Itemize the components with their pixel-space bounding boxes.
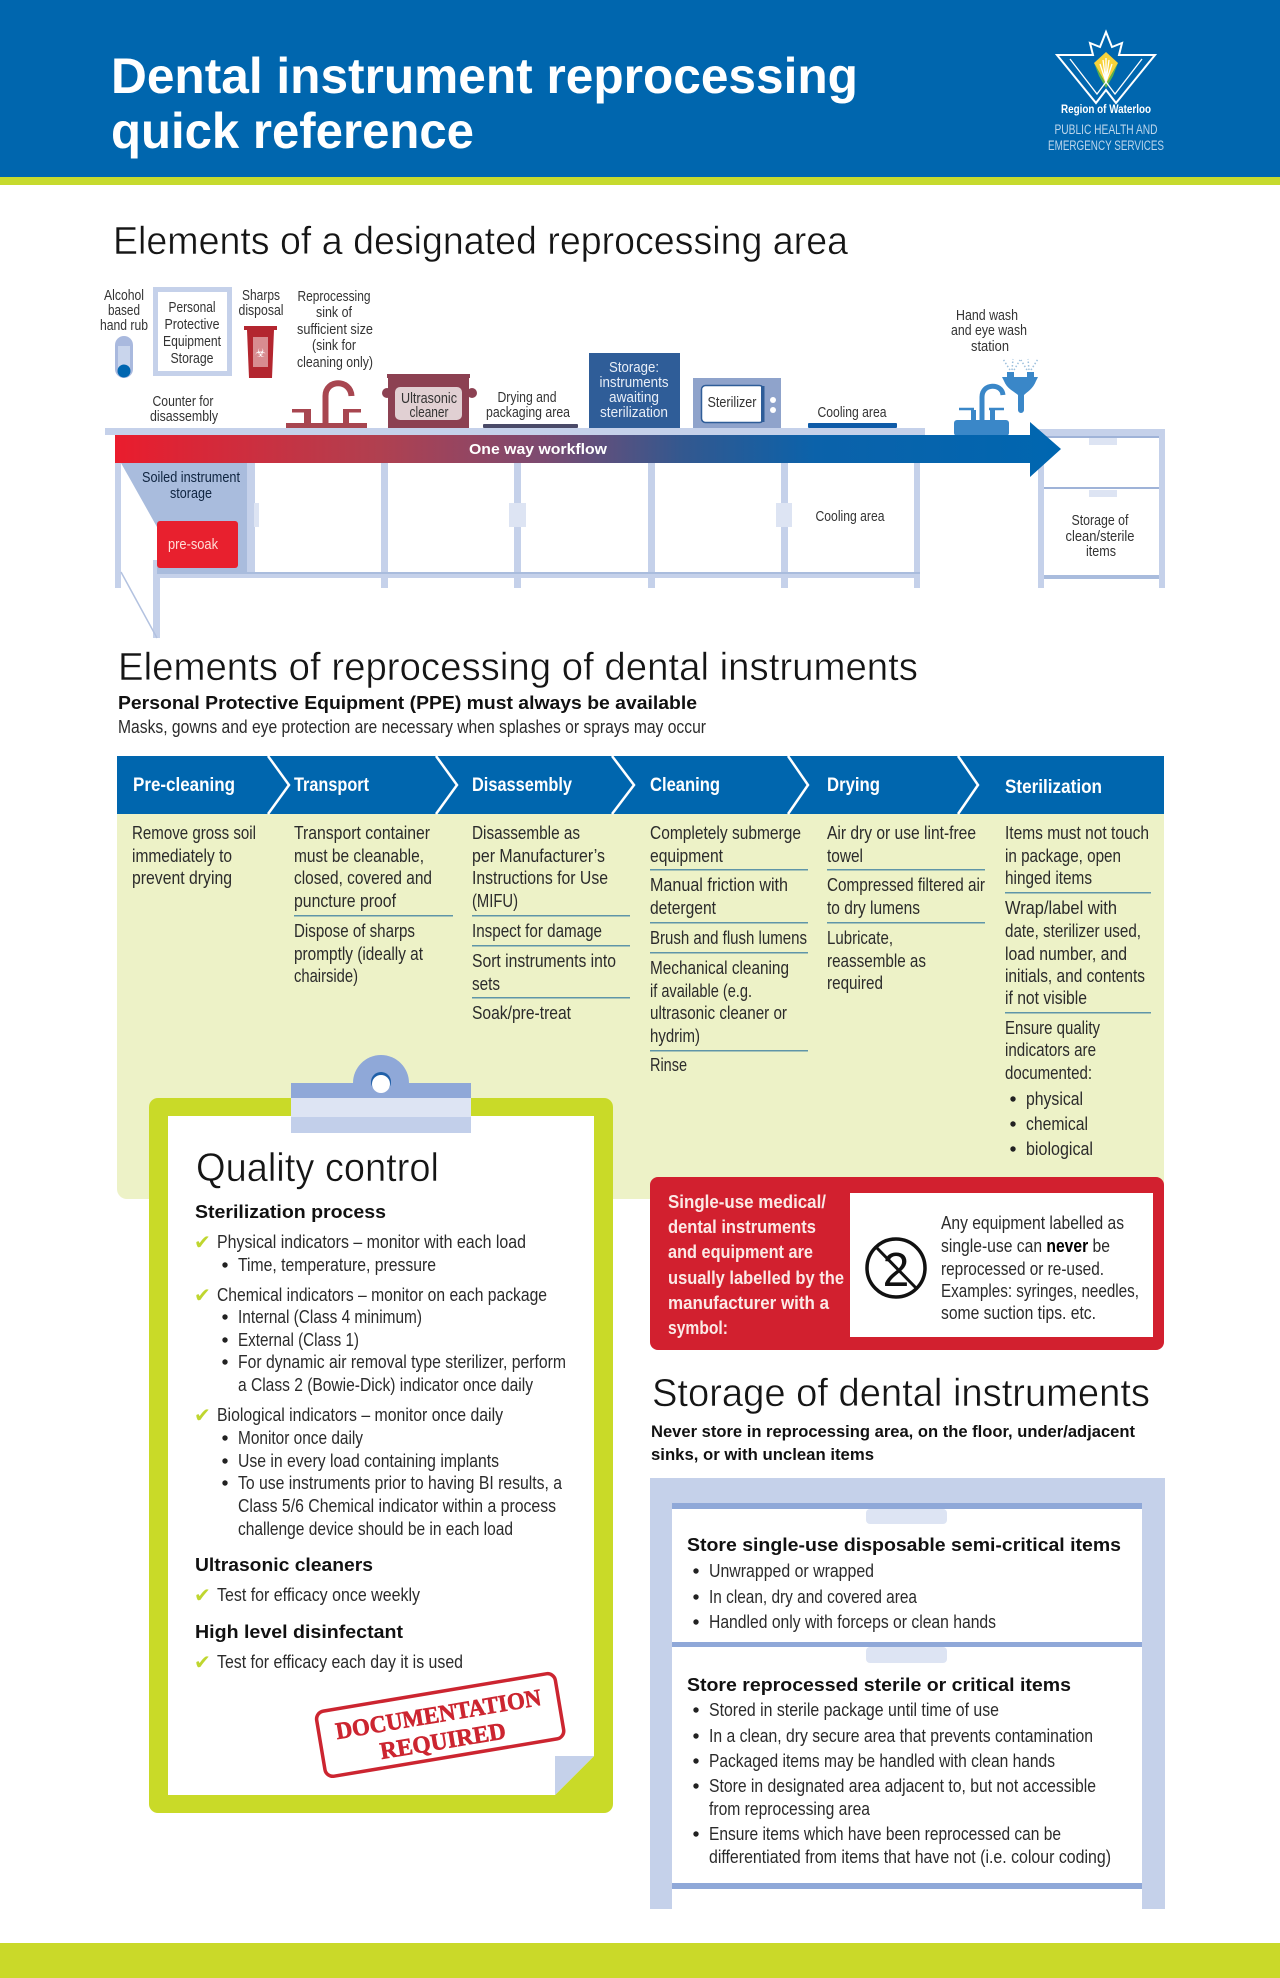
heading: elements of reprocessing: Elements of reprocessing of dental instruments [118,646,918,689]
icon: reprocessing sink faucet [286,383,367,428]
heading: designated reprocessing area: Elements of a designated reprocessing area [113,220,848,263]
cooling area on counter: Cooling area [818,405,887,421]
panel: quality control clipboard [149,1055,613,1813]
icon: do not reuse symbol: 2 [883,1244,909,1297]
column: transport: must be cleanable, [294,845,424,866]
heading: quality control: Quality control [196,1146,439,1190]
storage awaiting sterilization: Storage: [609,360,659,376]
title [111,48,858,159]
soiled instrument storage: Soiled instrument [142,470,240,486]
label: reprocessing sink [297,289,373,371]
PPE storage box: Storage [170,351,214,367]
soiled instrument storage: pre-soak [168,537,219,553]
label: reprocessing sink: sufficient size [297,322,373,338]
callout text: usually labelled by the [668,1267,844,1288]
panel: storage cabinet [650,1478,1165,1909]
label: alcohol based hand rub: hand rub [100,318,148,334]
PPE storage box: Protective [164,317,220,333]
chevron header band: Disassembly [472,775,572,796]
column: cleaning: if available (e.g. [650,980,752,1001]
icon: hand rub bottle [115,336,133,378]
label: reprocessing sink: cleaning only) [297,355,373,371]
label: alcohol based hand rub [100,288,148,334]
sterilizer [693,378,781,428]
column: cleaning: hydrim) [650,1025,700,1046]
section: sterilization process: External (Class 1) [238,1329,359,1350]
column: transport: puncture proof [294,890,397,911]
column: sterilization: if not visible [1005,987,1087,1008]
storage awaiting sterilization [589,353,680,428]
storage awaiting sterilization: sterilization [600,405,668,421]
column: disassembly: per Manufacturer’s [472,845,605,866]
shelf: sterile or critical items: Ensure items which have been reprocessed can be [709,1823,1061,1844]
column: cleaning [650,822,808,1075]
column: disassembly: Sort instruments into [472,950,616,971]
section: sterilization process: a Class 2 (Bowie-Dick) indicator once daily [238,1374,534,1395]
column: transport: chairside) [294,965,358,986]
column: drying [827,822,985,993]
section: sterilization process: Class 5/6 Chemical indicator within a process [238,1495,556,1516]
callout explanation: Examples: syringes, needles, [941,1280,1139,1301]
section: sterilization process: Chemical indicators – monitor on each package [217,1284,547,1305]
counter and cabinets [105,428,925,638]
column: sterilization: indicators are [1005,1039,1096,1060]
section: sterilization process: For dynamic air removal type sterilizer, perform [238,1351,566,1372]
shelf: sterile or critical items: Store in designated area adjacent to, but not accessible [709,1775,1096,1796]
column: sterilization: physical [1026,1088,1083,1109]
section: sterilization process: Physical indicators – monitor with each load [217,1231,526,1252]
callout explanation: single-use can never be [941,1235,1110,1256]
section: high level disinfectant: Test for efficacy each day it is used [217,1651,463,1672]
section: sterilization process: Time, temperature, pressure [238,1254,436,1275]
title: quick reference [111,103,474,159]
chevron header band: Pre-cleaning [133,775,235,796]
shelf: single-use items: Unwrapped or wrapped [709,1560,874,1581]
column: cleaning: Manual friction with [650,874,788,895]
column: sterilization: in package, open [1005,845,1121,866]
PPE note [118,692,706,737]
soiled instrument storage [121,463,247,574]
label: alcohol based hand rub: based [108,303,140,319]
section: ultrasonic cleaners: Test for efficacy once weekly [217,1584,421,1605]
column: cleaning: ultrasonic cleaner or [650,1002,787,1023]
column: sterilization: Ensure quality [1005,1017,1101,1038]
column: drying: to dry lumens [827,897,920,918]
title: Dental instrument reprocessing [111,48,858,104]
label: sharps disposal: Sharps [242,288,280,304]
logo: Region of Waterloo: Region of Waterloo [1061,104,1151,116]
cooling area under counter: Cooling area [816,509,885,525]
column: cleaning: Completely submerge [650,822,801,843]
section: high level disinfectant [194,1622,463,1674]
column: transport: Dispose of sharps [294,920,415,941]
section: sterilization process: ✔ [194,1403,211,1427]
shelf: single-use items: Handled only with forceps or clean hands [709,1611,996,1632]
column: sterilization: Wrap/label with [1005,897,1117,918]
icon: ultrasonic cleaner: Ultrasonic [401,391,457,407]
column: pre-cleaning [132,822,256,888]
callout text: dental instruments [668,1216,816,1237]
column: sterilization: hinged items [1005,867,1092,888]
column: sterilization: load number, and [1005,943,1127,964]
section: sterilization process: To use instruments prior to having BI results, a [238,1472,563,1493]
column: sterilization: date, sterilizer used, [1005,920,1141,941]
arrow: one way workflow [115,422,1061,477]
storage warning: sinks, or with unclean items [651,1445,874,1464]
section: sterilization process: ✔ [194,1230,211,1254]
labels: storage of clean/sterile items [1066,513,1134,560]
sterilizer: Sterilizer [708,395,757,411]
callout text: Single-use medical/ [668,1191,826,1212]
labels: storage of clean/sterile items: Storage of [1072,513,1129,529]
column: cleaning: Mechanical cleaning [650,957,789,978]
label: sharps disposal [238,288,284,319]
column: pre-cleaning: prevent drying [132,867,232,888]
header banner [0,0,1280,185]
column: disassembly: Instructions for Use [472,867,608,888]
callout text: symbol: [668,1317,728,1338]
footer band [0,1943,1280,1978]
section: sterilization process: challenge device should be in each load [238,1518,513,1539]
icon: sharps container: ☣ [255,346,266,360]
section: sterilization process: Sterilization process [195,1202,386,1222]
column: cleaning: Rinse [650,1054,687,1075]
shelf: sterile or critical items: Store reprocessed sterile or critical items [687,1675,1071,1695]
chevron header band: Sterilization [1005,777,1102,798]
label: reprocessing sink: sink of [316,305,353,321]
storage awaiting sterilization: instruments [600,375,668,391]
icon: eye wash station [1002,359,1038,413]
column: transport: promptly (ideally at [294,943,423,964]
shelf: single-use items: In clean, dry and covered area [709,1586,918,1607]
callout: single-use symbol [650,1177,1164,1350]
arrow: one way workflow: One way workflow [469,441,607,458]
column: drying: towel [827,845,863,866]
callout explanation: reprocessed or re-used. [941,1258,1104,1279]
shelf: single-use items: Store single-use disposable semi-critical items [687,1535,1121,1555]
column: pre-cleaning: immediately to [132,845,232,866]
cooling area on counter [808,405,897,428]
column: disassembly: (MIFU) [472,890,518,911]
callout explanation [941,1212,1139,1323]
icon: do not reuse symbol [867,1239,925,1297]
section: ultrasonic cleaners: ✔ [194,1583,211,1607]
shelf: single-use items [687,1535,1121,1632]
section: sterilization process: Internal (Class 4 minimum) [238,1306,422,1327]
PPE storage box [156,290,230,374]
chevron header band: Transport [294,775,370,796]
logo: Region of Waterloo: PUBLIC HEALTH AND [1054,122,1158,137]
section: sterilization process: Monitor once daily [238,1427,364,1448]
column: transport: closed, covered and [294,867,432,888]
workflow diagram [100,288,1165,638]
column: disassembly: Soak/pre-treat [472,1002,571,1023]
column: transport: Transport container [294,822,430,843]
logo: Region of Waterloo: EMERGENCY SERVICES [1048,138,1164,153]
callout text: and equipment are [668,1241,813,1262]
stamp: documentation required: DOCUMENTATION [334,1685,544,1745]
PPE note: Personal Protective Equipment (PPE) must always be available [118,692,697,713]
label: sharps disposal: disposal [238,303,284,319]
label: counter for disassembly [150,394,219,425]
column: cleaning: detergent [650,897,716,918]
drying and packaging area: Drying and [498,390,556,406]
column: pre-cleaning: Remove gross soil [132,822,256,843]
column: disassembly: sets [472,973,500,994]
PPE storage box: Personal [168,300,216,316]
PPE storage box: Equipment [163,334,221,350]
column: disassembly: Inspect for damage [472,920,602,941]
panel: process steps [117,756,1164,1199]
callout text: manufacturer with a [668,1292,830,1313]
storage warning: Never store in reprocessing area, on the floor, under/adjacent [651,1422,1135,1441]
label: hand wash and eye wash: station [971,339,1009,355]
column: drying: reassemble as [827,950,926,971]
column: disassembly: Disassemble as [472,822,580,843]
section: sterilization process: Use in every load containing implants [238,1450,499,1471]
clipboard clip [291,1055,471,1133]
column: sterilization [1005,822,1151,1159]
icon: hand wash sink [954,386,1009,436]
drying and packaging area: packaging area [486,405,571,421]
column: sterilization: documented: [1005,1062,1092,1083]
chevron header band: Drying [827,775,880,796]
callout explanation: Any equipment labelled as [941,1212,1124,1233]
column: sterilization: chemical [1026,1113,1088,1134]
section: high level disinfectant: ✔ [194,1650,211,1674]
shelf: sterile or critical items [687,1675,1111,1867]
heading: storage of dental instruments: Storage of dental instruments [652,1372,1150,1415]
label: hand wash and eye wash [951,308,1027,355]
section: high level disinfectant: High level disinfectant [195,1622,403,1642]
logo: Region of Waterloo [1048,32,1164,153]
column: disassembly [472,822,630,1023]
label: hand wash and eye wash: and eye wash [951,323,1027,339]
shelf: sterile or critical items: differentiated from items that have not (i.e. colour coding) [709,1846,1111,1867]
column: drying: Lubricate, [827,927,893,948]
label: reprocessing sink: Reprocessing [298,289,370,305]
shelf: sterile or critical items: from reprocessing area [709,1798,871,1819]
icon: sharps container [244,326,277,378]
column: sterilization: Items must not touch [1005,822,1149,843]
labels: storage of clean/sterile items: items [1086,544,1116,560]
page fold corner [555,1756,594,1795]
column: cleaning: equipment [650,845,723,866]
section: ultrasonic cleaners [194,1555,421,1607]
shelf: sterile or critical items: In a clean, dry secure area that prevents contamination [709,1725,1093,1746]
storage warning [651,1422,1135,1464]
section: ultrasonic cleaners: Ultrasonic cleaners [195,1555,373,1575]
labels: storage of clean/sterile items: clean/sterile [1066,529,1134,545]
callout explanation: some suction tips. etc. [941,1302,1096,1323]
right storage cabinet [1038,429,1165,588]
storage awaiting sterilization: awaiting [609,390,659,406]
section: sterilization process: ✔ [194,1283,211,1307]
column: drying: required [827,972,883,993]
drying and packaging area [483,390,578,428]
column: drying: Air dry or use lint-free [827,822,976,843]
label: alcohol based hand rub: Alcohol [104,288,144,304]
chevron header band: Cleaning [650,775,720,796]
shelf: sterile or critical items: Stored in sterile package until time of use [709,1699,999,1720]
label: reprocessing sink: (sink for [312,338,356,354]
column: drying: Compressed filtered air [827,874,985,895]
column: sterilization: biological [1026,1138,1093,1159]
shelf: sterile or critical items: Packaged items may be handled with clean hands [709,1750,1055,1771]
label: hand wash and eye wash: Hand wash [956,308,1018,324]
column: sterilization: initials, and contents [1005,965,1145,986]
callout text [668,1191,844,1338]
stamp: documentation required [315,1672,565,1778]
stamp: documentation required: REQUIRED [378,1718,508,1765]
icon: ultrasonic cleaner [382,374,477,428]
label: counter for disassembly: disassembly [150,409,219,425]
column: transport [294,822,453,986]
section: sterilization process: Biological indicators – monitor once daily [217,1404,504,1425]
section: sterilization process [194,1202,566,1539]
PPE note: Masks, gowns and eye protection are necessary when splashes or sprays may occur [118,716,706,737]
column: cleaning: Brush and flush lumens [650,927,807,948]
label: counter for disassembly: Counter for [152,394,214,410]
soiled instrument storage: storage [170,486,212,502]
icon: ultrasonic cleaner: cleaner [410,405,449,421]
chevron header band [117,756,1164,814]
